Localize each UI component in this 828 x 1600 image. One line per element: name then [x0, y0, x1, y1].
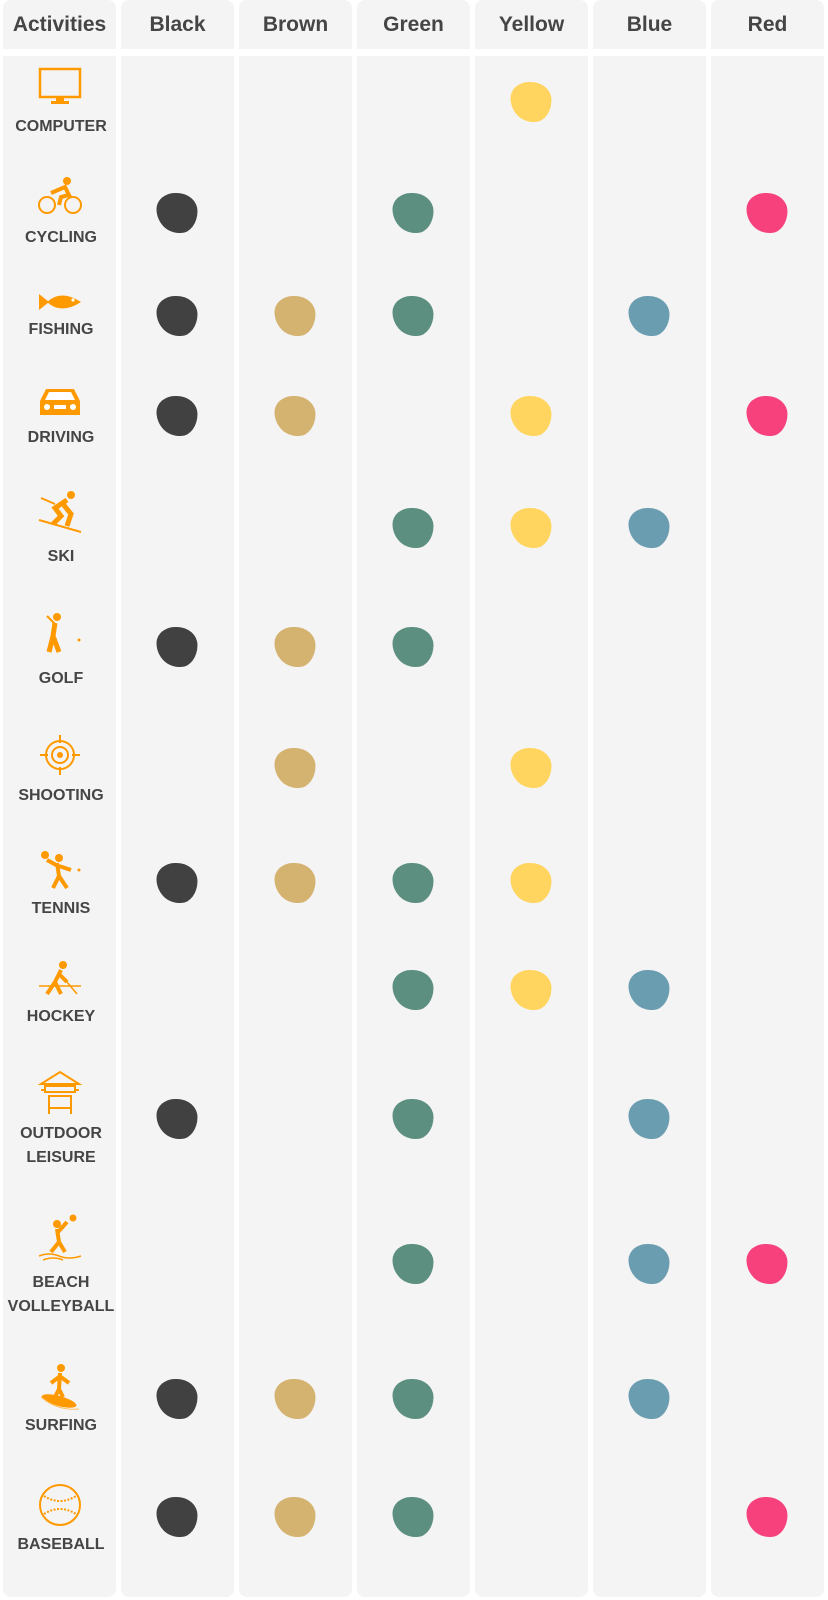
dots: computer [510, 82, 552, 122]
dots: golf [156, 627, 434, 667]
column: red [711, 56, 824, 1597]
dots: shooting [274, 748, 552, 788]
label: computer: COMPUTER [15, 118, 107, 135]
header: Blue: Blue [627, 13, 672, 36]
label: outdoor leisure: OUTDOOR [20, 1125, 102, 1142]
label: golf: GOLF [39, 670, 83, 687]
column: green [357, 56, 470, 1597]
icon: surfing [40, 1364, 79, 1410]
label: hockey: HOCKEY [27, 1008, 95, 1025]
column: black [121, 56, 234, 1597]
header: Blue [593, 0, 706, 49]
header: Black [121, 0, 234, 49]
label: outdoor leisure: LEISURE [26, 1149, 96, 1166]
label: shooting: SHOOTING [18, 787, 104, 804]
header: Brown: Brown [263, 13, 328, 36]
header: Green [357, 0, 470, 49]
icon: tennis [41, 851, 80, 890]
icon: cycling [38, 177, 82, 214]
header: Black: Black [149, 13, 206, 36]
header: Green: Green [383, 13, 444, 36]
header: Yellow [475, 0, 588, 49]
header: Activities: Activities [13, 13, 106, 36]
dots: driving [156, 396, 788, 436]
icon: fishing [39, 294, 81, 310]
label: ski: SKI [48, 548, 74, 565]
dots: outdoor leisure [156, 1099, 670, 1139]
icon: baseball [39, 1484, 81, 1526]
dots: baseball [156, 1497, 788, 1537]
label: outdoor leisure [20, 1125, 102, 1166]
label: beach volleyball: BEACH [33, 1274, 89, 1291]
column: activities [3, 56, 116, 1597]
label: cycling: CYCLING [25, 229, 97, 246]
icon: computer [38, 68, 82, 104]
icon: beach volleyball [38, 1214, 82, 1261]
header: Red [711, 0, 824, 49]
dots: ski [392, 508, 670, 548]
icon: driving [40, 389, 80, 415]
label: beach volleyball [8, 1274, 114, 1315]
label: fishing: FISHING [29, 321, 93, 338]
dots: hockey [392, 970, 670, 1010]
dots: tennis [156, 863, 552, 903]
label: tennis: TENNIS [32, 900, 90, 917]
label: beach volleyball: VOLLEYBALL [8, 1298, 114, 1315]
header: Red: Red [748, 13, 787, 36]
label: driving: DRIVING [28, 429, 94, 446]
header: Brown [239, 0, 352, 49]
icon: hockey [39, 961, 81, 996]
dots: fishing [156, 296, 670, 336]
column: blue [593, 56, 706, 1597]
label: surfing: SURFING [25, 1417, 97, 1434]
column: brown [239, 56, 352, 1597]
dots: cycling [156, 193, 788, 233]
header: Activities [3, 0, 116, 49]
icon: ski [38, 491, 82, 533]
icon: golf [46, 613, 80, 653]
icon: outdoor leisure [38, 1070, 82, 1114]
label: baseball: BASEBALL [17, 1536, 105, 1553]
column: yellow [475, 56, 588, 1597]
dots: surfing [156, 1379, 670, 1419]
header: Yellow: Yellow [499, 13, 564, 36]
icon: shooting [40, 735, 80, 775]
dots: beach volleyball [392, 1244, 788, 1284]
